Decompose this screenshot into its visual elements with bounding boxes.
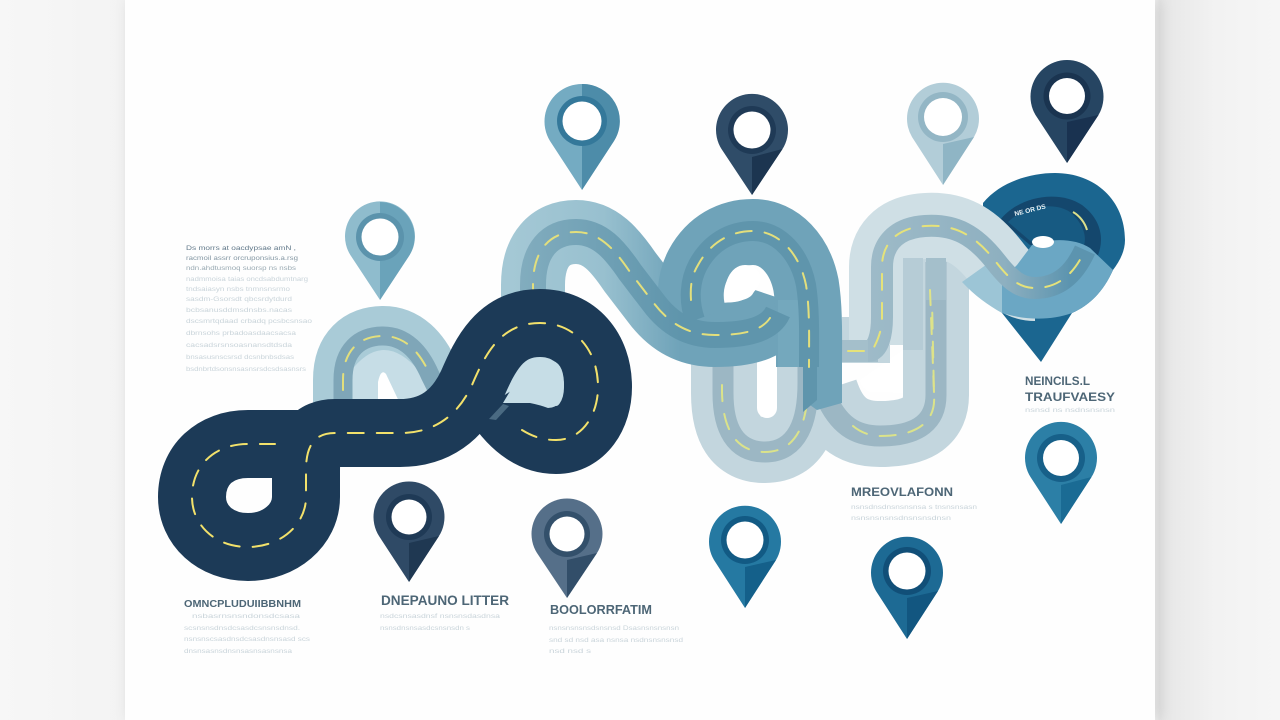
connector surface: [842, 340, 878, 362]
text block: centre right: MREOVLAFONN: [851, 485, 953, 499]
text block: centre right: nsnsdnsdnsnsnsnsa s tnsnsnsasn: [851, 504, 977, 511]
vertical road upper: [926, 258, 946, 300]
text block: lower left: dnsnsasnsdnsnsasnsasnsnsa: [184, 648, 292, 655]
text block: lower centre: BOOLORRFATIM: [550, 602, 652, 617]
surface: [868, 226, 1085, 351]
pale road dashes: [722, 300, 934, 452]
text block: centre right: [851, 485, 977, 522]
pin: lower slate: [532, 499, 602, 598]
connector band: [842, 317, 890, 363]
text block: left paragraph: tndsaiasyn nsbs tnmnsnsrmo: [186, 286, 290, 293]
band: [882, 226, 1035, 345]
pale lower roads: [722, 250, 936, 452]
text block: lower left: scsnsnsdnsdcsasdcsnsnsdnsd.: [184, 625, 300, 632]
pin hole: [1032, 236, 1054, 248]
surface: [343, 336, 450, 425]
pin: top left blue: [345, 201, 415, 300]
pin: top blue 1: [544, 84, 620, 190]
dashes: [848, 226, 1085, 351]
text block: left paragraph: bcbsanusddmsdnsbs.nacas: [186, 307, 293, 314]
vertical road dashes: [930, 290, 934, 392]
text block: left paragraph: cacsadsrsnsoasnansdtdsda: [186, 342, 293, 349]
blue descending road: [803, 367, 817, 412]
first arch surface: [533, 232, 778, 335]
loop hole: [724, 265, 760, 302]
text block: left paragraph: nadmmoisa taias oncdsabdumtnarg: [186, 276, 308, 283]
pale road surface: [723, 262, 936, 452]
band: [343, 336, 450, 425]
road 1: dark navy foreground road: [192, 323, 598, 547]
text block: right: nsnsd ns nsdnsnsnsn: [1025, 407, 1116, 414]
road 3: pale winding segment: [842, 226, 1113, 392]
pin: lower blue 1: [709, 506, 781, 608]
text block: left paragraph: dbrnsohs prbadoasdaacsacsa: [186, 330, 296, 337]
white gap: left: [757, 350, 777, 418]
text block: lower middle: [380, 593, 509, 632]
text block: left paragraph: racmoil assrr orcruponsius.a.rsg: [186, 255, 298, 262]
pin: lower blue 2: [871, 537, 943, 639]
pale fill behind dark road: [485, 345, 575, 415]
road dash: [1073, 212, 1087, 230]
loop band: [691, 232, 809, 367]
text block: lower middle: nsnsdnsnsasdcsnsnsdn s: [380, 625, 471, 632]
text block: left paragraph: ndn.ahdtusmoq suorsp ns nsbs: [186, 265, 297, 272]
text block: left paragraph: bnsasusnscsrsd dcsnbnbsdsas: [186, 354, 295, 361]
inner lighter vertical: [778, 300, 802, 367]
text block: lower centre: nsd nsd s: [549, 648, 592, 655]
text block: lower left: OMNCPLUDUIIBBNHM: [184, 598, 301, 610]
inner road area: [1008, 206, 1085, 250]
pin: top pale: [907, 83, 979, 185]
inner lighter fill: [350, 350, 445, 425]
vertical inner stripe: [903, 258, 923, 350]
pin: top right navy: [1030, 60, 1104, 163]
text block: centre right: nsnsnsnsnsdnsnsnsdnsn: [851, 515, 952, 522]
text block: lower centre: nsnsnsnsnsdsnsnsd Dsasnsnsnsnsn: [549, 625, 679, 632]
text block: left paragraph: sasdm-Gsorsdt qbcsrdytdurd: [186, 296, 292, 303]
surface: [192, 323, 598, 547]
blue descending band: [803, 367, 842, 410]
white spike: [378, 372, 404, 415]
text block: lower centre: snd sd nsd asa nsnsa nsdnsnsnsnsd: [549, 637, 683, 644]
text block: right: [1025, 374, 1116, 414]
text block: lower middle: nsdcsnsasdnsf nsnsnsdasdnsa: [380, 613, 500, 620]
text block: left paragraph: dscsmrtqdaad crbadq pcsbcsnsao: [186, 318, 312, 325]
text block: left paragraph: Ds morrs at oacdypsae amN ,: [186, 245, 296, 252]
first arch band: [533, 232, 785, 335]
first arch dashes: [533, 232, 770, 335]
pin: lower navy: [374, 482, 444, 582]
inner dark ring: [1000, 197, 1101, 255]
text block: lower centre: [549, 602, 683, 655]
text block: lower middle: DNEPAUNO LITTER: [381, 593, 509, 608]
text block: left paragraph: [186, 245, 312, 373]
dashes: [343, 336, 430, 390]
pin: right blue: [1025, 422, 1097, 524]
road 2: blue winding segment: [533, 231, 809, 367]
loop dashes: [691, 231, 809, 367]
text block: left paragraph: bsdnbrtdsonsnsasnsrsdcsdsasnsrs: [186, 366, 307, 373]
text block: right: NEINCILS.L: [1025, 374, 1090, 388]
big map pin with road passing through: [983, 173, 1125, 362]
loop surface: [691, 231, 809, 367]
pale loop opening: [503, 360, 564, 408]
highlight smudge: [489, 404, 509, 420]
lower band tone: [962, 262, 1040, 318]
road 0: pale left arch: [343, 336, 450, 425]
pin body: [983, 173, 1125, 362]
text block: lower left: nsbasrnsnsndonsdcsasa: [192, 613, 301, 620]
pin: top navy: [716, 94, 788, 195]
text block: lower left: [184, 598, 311, 655]
light pin section: [1002, 240, 1113, 319]
road dashes: [192, 323, 598, 547]
text block: lower left: nsnsnscsasdnsdcsasdnsnsasd scs: [184, 636, 311, 643]
text block: right: TRAUFVAESY: [1025, 390, 1115, 404]
white gap: right: [860, 350, 903, 393]
pin small label: NE OR DS: [1014, 203, 1047, 218]
pale road band: [724, 250, 936, 450]
